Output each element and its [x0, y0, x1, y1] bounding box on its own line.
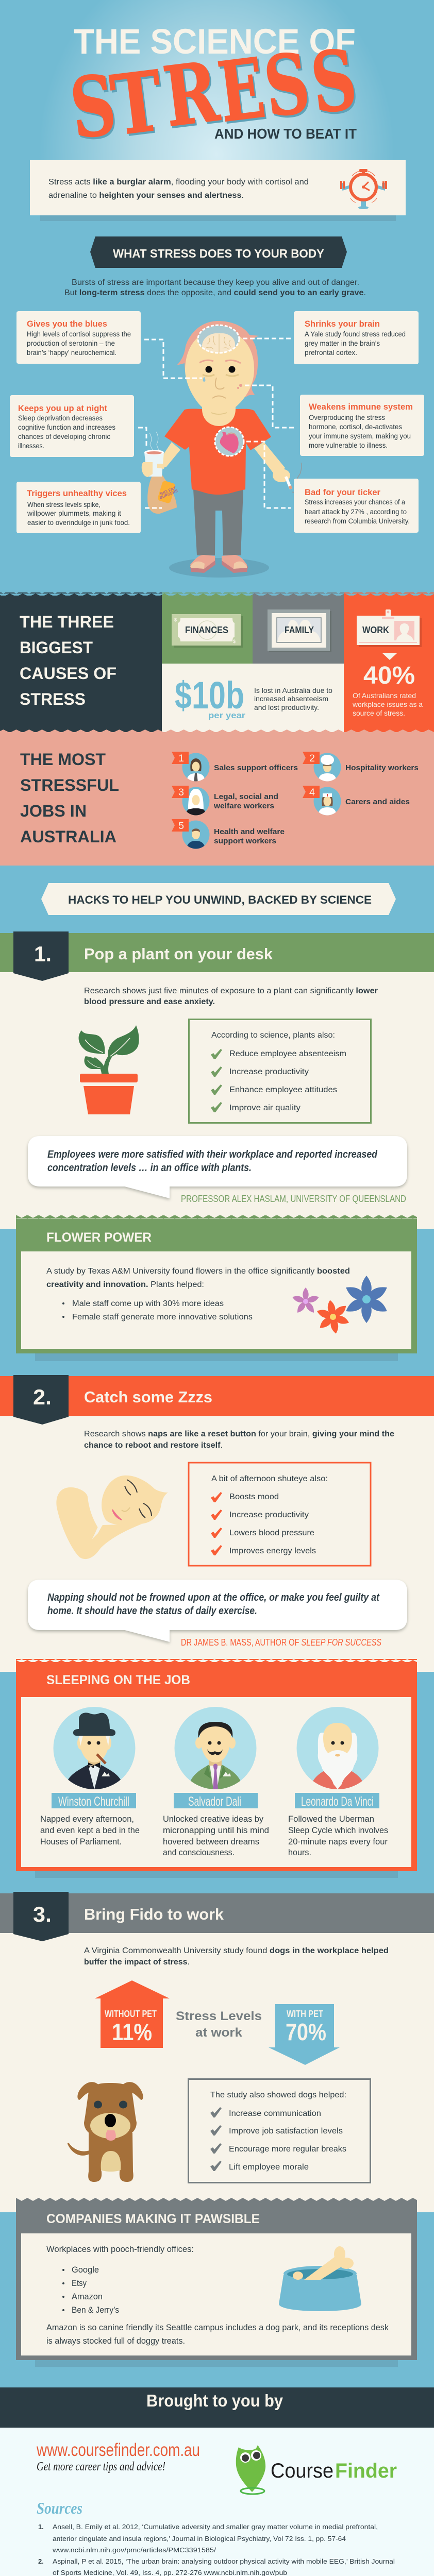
amazon note	[46, 2323, 389, 2346]
icon: family photo frame	[268, 609, 331, 652]
illustration: sleeping head	[56, 1476, 168, 1559]
section band 2	[0, 1376, 434, 1416]
company list intro: Workplaces with pooch-friendly offices:	[46, 2244, 194, 2254]
intro text: Stress acts like a burglar alarm , flooding your body with cortisol and	[48, 178, 309, 187]
title	[65, 22, 362, 158]
stat text: work issues: workplace issues as a	[352, 700, 423, 708]
footer background	[0, 2428, 434, 2576]
checklist 1: Reduce employee absenteeism	[229, 1049, 346, 1058]
checklist 2: A bit of afternoon shuteye also:	[211, 1475, 328, 1483]
brain	[198, 325, 239, 353]
arrow: without pet 11 percent: 11%	[112, 2019, 152, 2045]
checklist 1	[189, 1019, 371, 1123]
da vinci description: Followed the Uberman	[288, 1814, 374, 1824]
name labels	[52, 1793, 379, 1809]
section intro 3: A Virginia Commonwealth University study found dogs in the workplace helped	[84, 1946, 389, 1955]
flower power text: creativity and innovation. Plants helped:	[46, 1280, 204, 1289]
job 2: hospitality workers: Hospitality workers	[345, 764, 419, 772]
callout: gives you the blues: High levels of cortisol suppress the	[27, 330, 131, 338]
illustration: dog	[68, 2082, 143, 2182]
sources list: Ansell, B. Emily et al. 2012, ‘Cumulative adversity and smaller gray matter volume in medial prefrontal,	[53, 2523, 378, 2531]
section intro 1: Research shows just five minutes of exposure to a plant can significantly lower	[84, 987, 378, 995]
heading: the three biggest causes of stress: BIGGEST	[20, 638, 93, 657]
heading banner: what stress does to your body	[90, 236, 347, 268]
intro text	[48, 178, 309, 200]
da vinci description: 20-minute naps every four	[288, 1837, 388, 1846]
number tab 1	[13, 931, 69, 981]
band: brought to you by	[0, 2387, 434, 2428]
checklist 3: Encourage more regular breaks	[229, 2145, 346, 2154]
hair	[177, 321, 259, 399]
name labels: Winston Churchill	[58, 1794, 129, 1809]
job 5: health and welfare support workers	[172, 819, 285, 850]
sources list: anterior cingulate and insula regions,’ Journal in Biological Psychiatry, Vol 72 Iss. 1, pp. 57-64	[53, 2535, 346, 2543]
source numbers: 1.	[38, 2523, 44, 2531]
name labels: Leonardo Da Vinci	[301, 1794, 374, 1809]
header glow	[0, 0, 434, 221]
checklist 2: Lowers blood pressure	[229, 1529, 314, 1537]
portrait: churchill	[54, 1707, 135, 1789]
heading: the most stressful jobs in australia: STRESSFUL	[20, 776, 119, 794]
icon: finances banknote: $	[233, 639, 236, 644]
stat: 40 percent: 40%	[363, 662, 415, 689]
section intro 1	[84, 987, 378, 1006]
callout: weakens immune system: more vulnerable to illness.	[309, 442, 388, 449]
dali description: micronapping until his mind	[163, 1825, 269, 1835]
job 5: health and welfare support workers: 5	[178, 821, 184, 832]
dali description: and consciousness.	[163, 1848, 235, 1857]
logo wordmark: Course	[271, 2460, 333, 2482]
intro paragraph: bursts of stress: Bursts of stress are important because they keep you alive and out of danger.	[72, 278, 359, 287]
job 5: health and welfare support workers: support workers	[214, 837, 276, 845]
bullet list: companies: Amazon	[72, 2292, 103, 2301]
illustration: dog bowl with bone	[279, 2246, 361, 2311]
callout: bad for your ticker: Bad for your ticker	[305, 488, 381, 497]
intro paragraph: bursts of stress	[64, 278, 366, 297]
title word: stress: T	[106, 52, 168, 155]
callout: keeps you up at night: chances of developing chronic	[18, 433, 110, 440]
callout: bad for your ticker: heart attack by 27% , according to	[305, 508, 407, 516]
job 2: hospitality workers	[303, 752, 419, 783]
number tab 2	[13, 1375, 69, 1425]
heading: the three biggest causes of stress: STRESS	[20, 690, 86, 708]
heading: the three biggest causes of stress	[20, 613, 116, 708]
section band 1	[0, 933, 434, 972]
churchill description: Houses of Parliament.	[40, 1837, 122, 1846]
sources list: Aspinall, P et al. 2015, ‘The urban brain: analysing outdoor physical activity with mobile EEG,’ British Journal	[53, 2557, 395, 2565]
bullet list: flower power: Female staff generate more innovative solutions	[72, 1313, 253, 1321]
callout: triggers unhealthy vices: easier to overindulge in junk food.	[27, 519, 130, 527]
job 5: health and welfare support workers: Health and welfare	[214, 827, 285, 836]
portrait: da vinci	[297, 1707, 378, 1789]
heading: flower power: FLOWER POWER	[46, 1230, 152, 1245]
amazon note: Amazon is so canine friendly its Seattle campus includes a dog park, and its receptions desk	[46, 2323, 389, 2332]
callout: weakens immune system: your immune system, making you	[309, 432, 411, 440]
sources list: www.ncbi.nlm.nih.gov/pmc/articles/PMC3391585/	[52, 2546, 216, 2554]
callout: gives you the blues	[16, 311, 141, 364]
job 4: carers and aides: 4	[309, 787, 315, 798]
heading banner: hacks	[41, 883, 396, 915]
title word: stress	[65, 31, 362, 158]
job 1: sales support officers: 1	[178, 753, 184, 764]
stat: 10 billion per year: $10b	[175, 674, 244, 717]
section intro 3: buffer the impact of stress .	[84, 1958, 190, 1967]
heading: the most stressful jobs in australia	[20, 750, 119, 846]
job 4: carers and aides	[303, 786, 410, 817]
da vinci description: Sleep Cycle which involves	[288, 1825, 388, 1835]
section band 3	[0, 1893, 434, 1933]
quote bubble 1: Employees were more satisfied with their workplace and reported increased	[47, 1149, 378, 1160]
name labels: Salvador Dali	[188, 1794, 241, 1809]
heading: the three biggest causes of stress: CAUSES OF	[20, 664, 116, 683]
flower power text: A study by Texas A&M University found flowers in the office significantly boosted	[46, 1267, 350, 1276]
panel: sleeping on the job	[16, 1659, 417, 1878]
icon: work id badge	[357, 609, 422, 647]
arrow: with pet 70 percent: 70%	[286, 2019, 326, 2045]
burger bag	[147, 468, 178, 514]
bullet list: companies: Google	[72, 2265, 99, 2275]
title word: stress: R	[159, 43, 224, 146]
heading: sleeping on the job: SLEEPING ON THE JOB	[46, 1673, 190, 1687]
intro panel	[30, 160, 406, 221]
checklist 1: According to science, plants also:	[211, 1031, 335, 1040]
callout: gives you the blues: Gives you the blues	[27, 319, 107, 329]
quote bubble 2	[28, 1580, 407, 1642]
quote bubble 2: Napping should not be frowned upon at the office, or make you feel guilty at	[47, 1592, 380, 1603]
sources list	[38, 2523, 395, 2576]
checklist 3	[189, 2079, 370, 2182]
checklist 2	[189, 1463, 371, 1566]
callout: weakens immune system: hormone, cortisol, de-activates	[309, 423, 402, 431]
job 2: hospitality workers: 2	[309, 753, 315, 764]
number tab 3: 3.	[33, 1902, 52, 1926]
burger bag: BIG FAT	[159, 485, 177, 497]
section intro 2: chance to reboot and restore itself .	[84, 1441, 223, 1450]
churchill description: and even kept a bed in the	[40, 1825, 140, 1835]
icon: flexing alarm clock	[340, 169, 387, 209]
callout: keeps you up at night: Keeps you up at night	[18, 404, 108, 413]
checklist 1: Enhance employee attitudes	[229, 1086, 337, 1094]
arrow: with pet 70 percent: WITH PET	[287, 2009, 323, 2019]
heading banner: hacks: HACKS TO HELP YOU UNWIND, BACKED BY SCIENCE	[68, 893, 372, 906]
quote bubble 2: home. It should have the status of daily exercise.	[47, 1605, 257, 1617]
bullet list: companies	[62, 2265, 119, 2315]
quote bubble 1	[28, 1136, 407, 1198]
stat text: work issues	[352, 691, 423, 717]
title word: stress: S	[259, 35, 315, 136]
icon: work id badge: WORK	[362, 625, 389, 635]
label: stress levels at work: at work	[195, 2026, 243, 2040]
section 2: catch some zzzs	[0, 1375, 434, 1672]
churchill description	[40, 1814, 140, 1846]
checklist 3: Lift employee morale	[229, 2163, 309, 2172]
arrow: without pet 11 percent	[95, 1980, 170, 2048]
face	[185, 330, 254, 411]
arms	[157, 442, 285, 478]
logo wordmark: Finder	[335, 2460, 397, 2482]
website link: www.coursefinder.com.au	[36, 2440, 200, 2460]
callout: weakens immune system: Weakens immune system	[309, 402, 413, 412]
callout: bad for your ticker: Stress increases your chances of a	[305, 498, 405, 506]
band: brought to you by: Brought to you by	[146, 2391, 283, 2410]
callout: shrinks your brain: prefrontal cortex.	[305, 349, 357, 357]
dali description	[163, 1814, 269, 1857]
source numbers	[38, 2523, 47, 2576]
job 1: sales support officers: Sales support officers	[214, 764, 298, 772]
bullet list: companies: Ben & Jerry’s	[72, 2305, 119, 2315]
da vinci description	[288, 1814, 388, 1857]
section intro 1: blood pressure and ease anxiety.	[84, 997, 215, 1006]
checklist 2: Boosts mood	[229, 1493, 279, 1501]
quote bubble 1: concentration levels … in an office with plants.	[47, 1162, 252, 1174]
section title 3: Bring Fido to work	[84, 1905, 224, 1923]
icon: finances banknote: FINANCES	[185, 625, 228, 635]
job 1: sales support officers	[172, 752, 298, 783]
title word: stress: S	[306, 31, 362, 132]
icon: finances banknote	[172, 614, 243, 648]
callout: gives you the blues: production of serotonin – the	[27, 340, 115, 347]
checklist 3: The study also showed dogs helped:	[210, 2091, 346, 2099]
da vinci description: hours.	[288, 1848, 311, 1857]
section intro 2	[84, 1430, 394, 1450]
heading: the three biggest causes of stress: THE THREE	[20, 613, 114, 631]
title line: the science of: THE SCIENCE OF	[74, 22, 356, 61]
heading: the most stressful jobs in australia: THE MOST	[20, 750, 106, 769]
callout: triggers unhealthy vices: Triggers unhealthy vices	[27, 489, 127, 498]
checklist 3: Improve job satisfaction levels	[229, 2127, 343, 2136]
callout: weakens immune system: Overproducing the stress	[309, 414, 385, 421]
sources heading: Sources	[37, 2499, 82, 2517]
panel: companies making it pawsible	[16, 2198, 417, 2367]
shirt	[164, 409, 271, 495]
title word: stress: S	[65, 57, 121, 158]
stat text: lost productivity	[254, 686, 332, 711]
callout: shrinks your brain: A Yale study found stress reduced	[305, 330, 406, 338]
heart	[215, 427, 244, 456]
cigarette and smoke	[285, 463, 302, 493]
heading banner: what stress does to your body: WHAT STRESS DOES TO YOUR BODY	[113, 247, 324, 260]
stat: 10 billion per year: per year	[208, 710, 245, 720]
stat text: work issues: source of stress.	[353, 709, 405, 717]
job 3: legal, social and welfare workers: 3	[178, 787, 184, 798]
checklist 3: Increase communication	[229, 2109, 321, 2118]
arrow: work statistic pointer	[382, 653, 397, 660]
section 1: pop a plant	[0, 931, 434, 1229]
callout: keeps you up at night: illnesses.	[18, 442, 44, 450]
panel: three biggest causes of stress	[0, 592, 434, 732]
job 3: legal, social and welfare workers: Legal, social and	[214, 792, 278, 801]
callout: shrinks your brain: grey matter in the brain’s	[305, 340, 380, 347]
callout: triggers unhealthy vices: When stress levels spike,	[27, 501, 101, 509]
checklist 1: Improve air quality	[229, 1104, 301, 1112]
icon: finances banknote: $	[174, 617, 177, 622]
arrow: without pet 11 percent: WITHOUT PET	[105, 2009, 157, 2019]
tagline: Get more career tips and advice!	[37, 2460, 165, 2473]
panel: flower power	[16, 1215, 417, 1361]
portrait: dali	[174, 1707, 257, 1789]
intro paragraph: bursts of stress: But long-term stress does the opposite, and could send you to an early grave .	[64, 289, 366, 297]
callout: shrinks your brain: Shrinks your brain	[305, 319, 380, 329]
checklist 2: Increase productivity	[229, 1511, 309, 1519]
callout: bad for your ticker: research from Columbia University.	[305, 517, 410, 525]
coffee cup in hand	[142, 432, 166, 477]
section title 2: Catch some Zzzs	[84, 1388, 212, 1406]
callout: keeps you up at night	[10, 395, 134, 457]
number tab 1: 1.	[34, 942, 52, 966]
checklist 2: Improves energy levels	[229, 1547, 316, 1555]
dali description: Unlocked creative ideas by	[163, 1814, 263, 1824]
logo: coursefinder owl	[236, 2445, 265, 2494]
callout: bad for your ticker	[294, 479, 419, 533]
callout: triggers unhealthy vices: willpower plummets, making it	[27, 510, 121, 517]
quote attribution 2: DR JAMES B. MASS, AUTHOR OF SLEEP FOR SUCCESS	[181, 1637, 381, 1648]
stat text: lost productivity: increased absenteeism	[254, 694, 328, 703]
callout: keeps you up at night: Sleep deprivation decreases	[18, 414, 103, 422]
illustration: stressed person	[142, 321, 302, 578]
arrow: with pet 70 percent	[269, 2004, 340, 2065]
section 3: bring fido to work	[0, 1892, 434, 2212]
stat text: lost productivity: Is lost in Australia due to	[254, 686, 332, 694]
stat text: work issues: Of Australians rated	[353, 691, 416, 700]
intro text: adrenaline to heighten your senses and alertness .	[48, 191, 244, 200]
trousers	[193, 489, 243, 555]
heading: the most stressful jobs in australia: AUSTRALIA	[20, 827, 116, 846]
dali description: hovered between dreams	[163, 1837, 259, 1846]
section intro 2: Research shows naps are like a reset button for your brain, giving your mind the	[84, 1430, 394, 1438]
heading: the most stressful jobs in australia: JOBS IN	[20, 802, 87, 820]
bullet list: flower power	[62, 1299, 253, 1321]
churchill description: Napped every afternoon,	[40, 1814, 134, 1824]
title word: stress: E	[213, 39, 270, 141]
label: stress levels at work: Stress Levels	[176, 2009, 262, 2023]
icon: family photo frame: FAMILY	[285, 625, 314, 635]
heading: companies making it pawsible: COMPANIES MAKING IT PAWSIBLE	[46, 2212, 260, 2226]
burger bag: BURGERS	[159, 488, 178, 500]
callout: keeps you up at night: cognitive function and increases	[18, 423, 115, 431]
job 4: carers and aides: Carers and aides	[345, 798, 410, 806]
panel: most stressful jobs	[0, 730, 434, 866]
callout: triggers unhealthy vices	[16, 482, 141, 533]
neck	[202, 402, 236, 426]
source numbers: 2.	[38, 2557, 44, 2565]
job 3: legal, social and welfare workers: welfare workers	[213, 802, 274, 810]
job 3: legal, social and welfare workers	[172, 786, 278, 817]
flower power text	[46, 1267, 350, 1289]
amazon note: is always stocked full of doggy treats.	[46, 2336, 185, 2346]
stat text: lost productivity: and lost productivity.	[254, 703, 319, 711]
icon: potted plant	[79, 1025, 139, 1114]
section intro 3	[84, 1946, 389, 1967]
callout: gives you the blues: brain’s ‘happy’ neurochemical.	[27, 349, 116, 357]
label: stress levels at work	[176, 2009, 262, 2040]
callout: shrinks your brain	[294, 311, 419, 364]
dashed connector lines	[138, 338, 295, 508]
section title 1: Pop a plant on your desk	[84, 945, 273, 963]
callout: weakens immune system	[300, 395, 424, 456]
facial features	[199, 360, 242, 414]
logo wordmark	[271, 2460, 397, 2482]
number tab 3	[13, 1892, 69, 1941]
bullet list: flower power: Male staff come up with 30% more ideas	[72, 1299, 224, 1308]
shoes	[190, 555, 248, 573]
number tab 2: 2.	[33, 1385, 52, 1409]
checklist 1: Increase productivity	[229, 1067, 309, 1076]
bullet list: companies: Etsy	[72, 2278, 87, 2288]
icon: flowers	[292, 1276, 390, 1334]
title line: and how to beat it: AND HOW TO BEAT IT	[214, 126, 357, 142]
